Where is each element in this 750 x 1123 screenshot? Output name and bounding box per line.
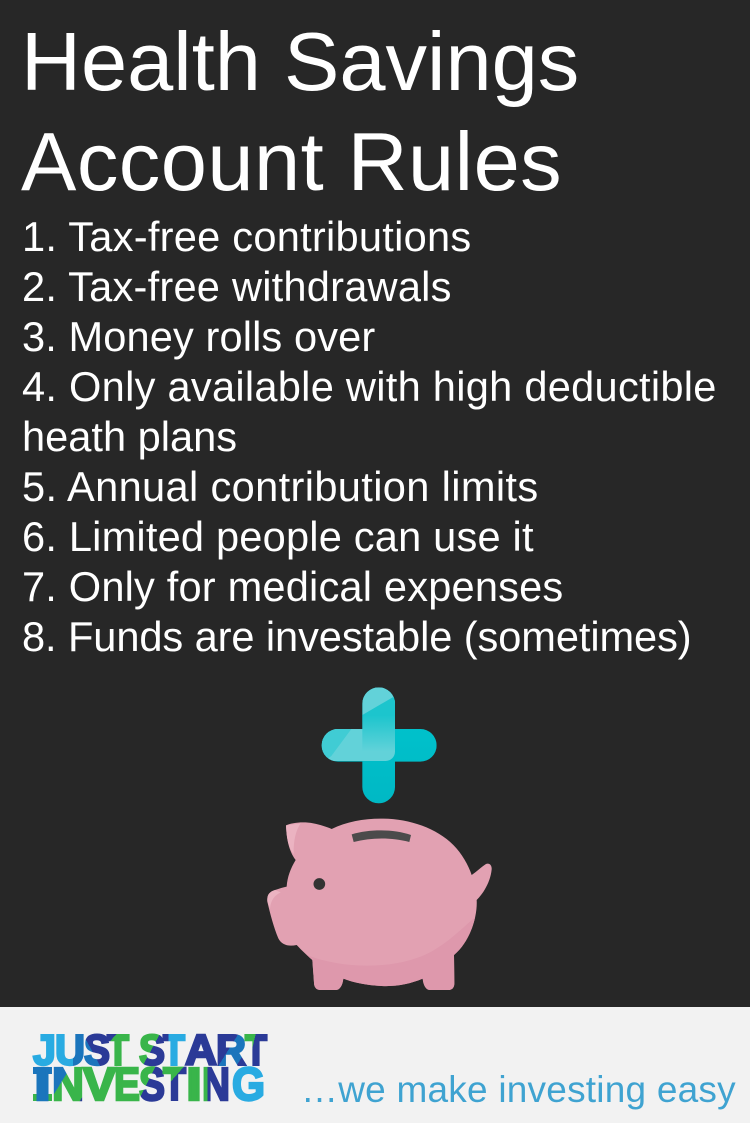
rules list: 8. Funds are investable (sometimes) — [22, 613, 692, 660]
logo line: INVESTING: N — [202, 1058, 230, 1110]
logo line: JUST START: T — [245, 1026, 267, 1074]
logo line: JUST START: S — [139, 1026, 165, 1074]
rules list — [22, 213, 717, 660]
rules list: heath plans — [22, 413, 237, 460]
rules list: 7. Only for medical expenses — [22, 563, 563, 610]
logo — [32, 1026, 268, 1110]
eye — [314, 878, 325, 890]
tagline: …we make investing easy — [301, 1069, 736, 1110]
logo line: INVESTING: T — [163, 1058, 186, 1110]
logo line: INVESTING: N — [52, 1058, 84, 1110]
rules list: 6. Limited people can use it — [22, 513, 534, 560]
logo line: INVESTING: I — [186, 1058, 202, 1110]
logo line: JUST START — [33, 1026, 267, 1074]
rules list: 2. Tax-free withdrawals — [22, 263, 452, 310]
logo line: INVESTING: I — [34, 1058, 51, 1110]
logo line: JUST START: U — [55, 1026, 85, 1074]
icon: medical cross — [322, 687, 437, 804]
logo line: JUST START: R — [216, 1026, 246, 1074]
logo line: JUST START: S — [84, 1026, 110, 1074]
coin slot — [352, 830, 411, 842]
logo line: JUST START: A — [185, 1026, 217, 1074]
rules list: 3. Money rolls over — [22, 313, 375, 360]
logo line: JUST START: T — [107, 1026, 129, 1074]
footer band — [0, 1007, 750, 1123]
title: Account Rules — [21, 115, 562, 208]
logo line: INVESTING: E — [114, 1058, 140, 1110]
title — [21, 15, 579, 208]
rules list: 4. Only available with high deductible — [22, 363, 717, 410]
logo line: INVESTING: S — [139, 1058, 165, 1110]
logo line: INVESTING: V — [83, 1058, 116, 1110]
logo line: JUST START: J — [33, 1026, 56, 1074]
logo line: INVESTING — [33, 1058, 265, 1110]
logo line: JUST START: T — [163, 1026, 185, 1074]
rules list: 1. Tax-free contributions — [22, 213, 471, 260]
rules list: 5. Annual contribution limits — [22, 463, 538, 510]
title: Health Savings — [21, 15, 579, 108]
icon: piggy bank — [267, 818, 492, 990]
logo line: INVESTING: G — [232, 1058, 265, 1110]
